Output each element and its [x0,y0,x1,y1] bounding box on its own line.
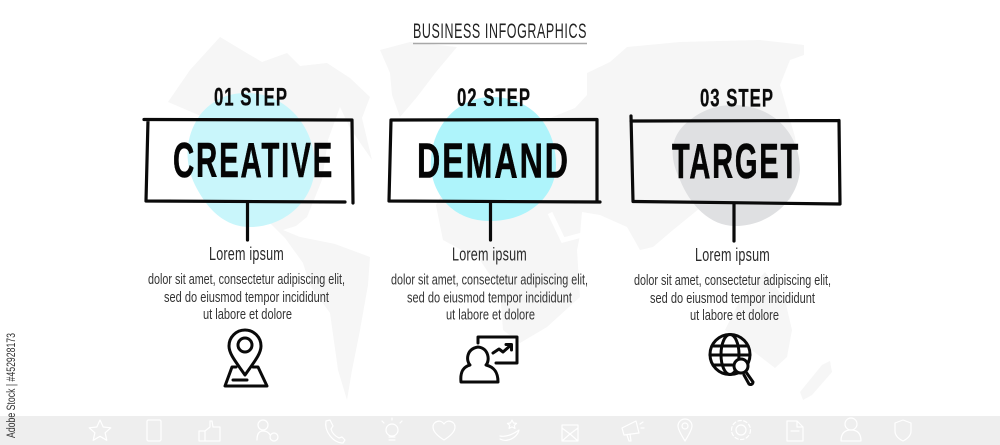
icon: telephone handset [326,420,345,443]
description 2: dolor sit amet, consectetur adipiscing elit, [391,272,588,288]
subtitle 3: Lorem ipsum [695,245,770,265]
description 2 [391,272,588,324]
description 3: sed do eiusmod tempor incididunt [650,291,815,307]
description 1: ut labore et dolore [203,307,292,323]
icon: person [841,418,861,441]
icon: star [89,420,111,440]
icon: thumbs up [199,421,220,441]
step label 3: 03 STEP [700,84,774,112]
description 2: sed do eiusmod tempor incididunt [407,290,572,306]
icon: document [787,421,803,441]
accent blob 2 [431,97,556,221]
accent blob 3 [673,105,800,226]
icon: presenter with chart [461,337,517,382]
description 1: sed do eiusmod tempor incididunt [164,290,329,306]
heading creative: CREATIVE [173,134,334,188]
icon: map pin [225,330,267,386]
icon: gear [732,420,750,440]
description 1: dolor sit amet, consectetur adipiscing elit, [148,272,345,288]
side credit text: Adobe Stock | #452928173 [6,333,18,438]
heading target: TARGET [672,135,800,189]
description 1 [148,272,345,323]
icon: hand with star [500,420,519,440]
title: BUSINESS INFOGRAPHICS [413,20,587,43]
icon: heart [433,421,455,440]
step label 1: 01 STEP [214,84,288,112]
icon: megaphone [622,421,644,441]
icon: light bulb [382,418,402,440]
description 3: dolor sit amet, consectetur adipiscing elit, [634,273,831,289]
icon: location pin [678,419,692,441]
hand drawn box 3 [631,116,840,204]
connector stem 1 [246,203,249,240]
icon: mobile phone [147,420,161,441]
panel: step 2 demand [389,84,600,382]
icon: globe with magnifier [710,334,753,385]
hand drawn box 1 [144,120,353,203]
panel: step 3 target [631,84,840,385]
heading demand: DEMAND [417,134,570,188]
connector stem 2 [489,203,492,240]
description 2: ut labore et dolore [446,308,535,324]
subtitle 2: Lorem ipsum [452,244,527,264]
connector stem 3 [732,204,736,241]
accent blob 1 [188,93,315,227]
icon: shield [895,420,911,441]
hand drawn box 2 [389,120,600,202]
icon: open envelope [562,425,578,441]
description 3: ut labore et dolore [690,308,779,324]
step label 2: 02 STEP [457,84,531,112]
subtitle 1: Lorem ipsum [209,244,284,264]
background world map [168,37,832,400]
footer band [0,416,1000,445]
icon: user with check [257,420,278,441]
description 3 [634,273,831,324]
panel: step 1 creative [144,84,353,386]
